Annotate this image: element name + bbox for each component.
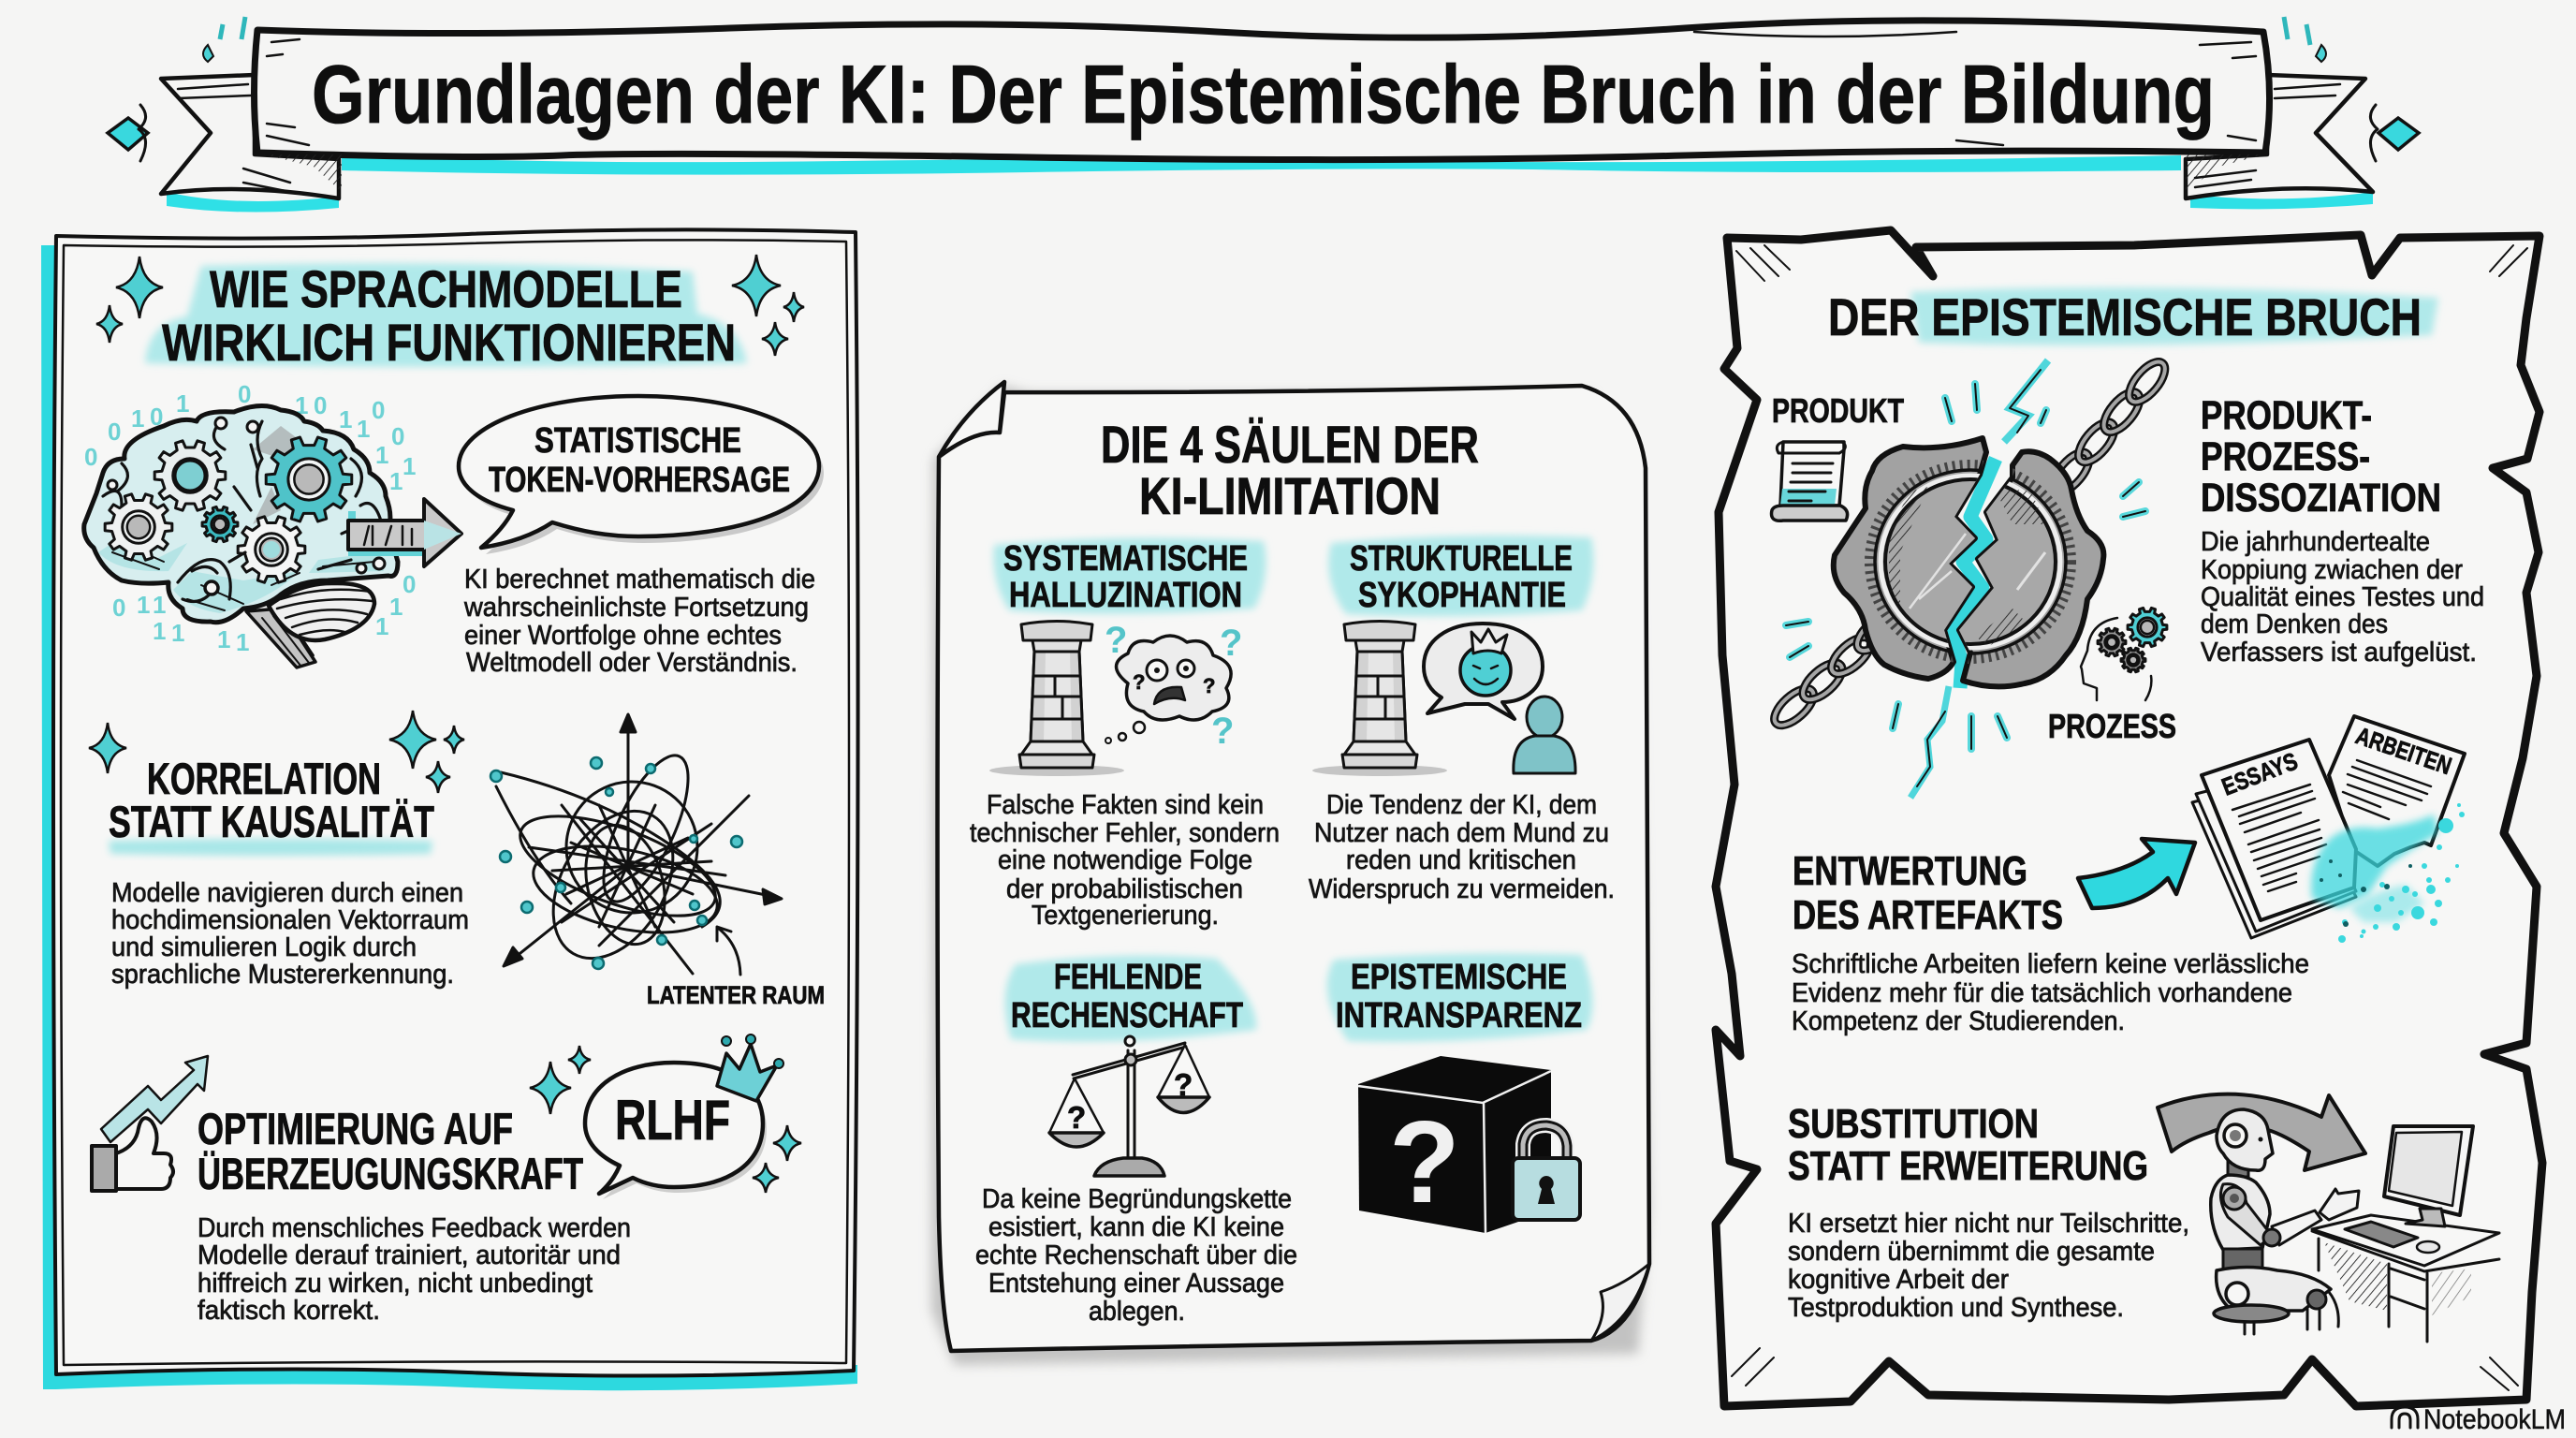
text: Vektorraum: und simulieren Logik durch <box>111 932 417 962</box>
icon: brain with gears: 0 <box>402 570 416 598</box>
heading: Produkt-Prozess-Dissoziation: PRODUKT- <box>2201 393 2372 438</box>
icon: brain with gears: 0 <box>314 391 327 419</box>
icon: brain with gears: 1 <box>176 389 189 418</box>
label: latenter Raum: LATENTER RAUM <box>647 981 825 1009</box>
text: Koppiung: Qualität eines Testes und <box>2201 582 2484 612</box>
icon: brain with gears: 1 <box>153 591 166 619</box>
speech bubble: RLHF <box>585 1063 767 1199</box>
label: Produkt: PRODUKT <box>1772 391 1904 430</box>
text: Nutzer nach dem Mund zu <box>1314 818 1609 848</box>
icon: lightning and sparks <box>1786 360 2145 798</box>
text: Entstehung einer Aussage <box>988 1269 1284 1299</box>
text: Feedback: faktisch korrekt. <box>198 1296 380 1326</box>
heading: DER EPISTEMISCHE BRUCH <box>1828 287 2422 346</box>
pillar 1: systematische Halluzination: HALLUZINATION <box>1009 576 1242 615</box>
sparkles <box>530 1046 801 1193</box>
text: Feedback: hiffreich zu wirken, nicht unbedingt <box>198 1269 593 1299</box>
icon: brain with gears: 1 <box>295 391 308 419</box>
icon: head with gears <box>2081 608 2167 700</box>
panel: wie Sprachmodelle funktionieren <box>41 229 858 1390</box>
icon: confused cloud: ? <box>1105 620 1127 661</box>
icon: flattering speech bubble <box>1424 624 1543 719</box>
icon: black box: ? <box>1389 1098 1460 1227</box>
heading: KI-LIMITATION <box>1139 466 1441 525</box>
icon: confused cloud: ? <box>1220 623 1242 664</box>
heading: Korrelation statt Kausalität: STATT KAUSALITÄT <box>109 797 434 846</box>
heading: Substitution: STATT ERWEITERUNG <box>1788 1143 2148 1189</box>
icon: confused cloud: ? <box>1211 711 1234 752</box>
heading: Korrelation statt Kausalität <box>109 754 434 856</box>
heading: Korrelation statt Kausalität: KORRELATION <box>147 754 381 803</box>
icon: brain with gears: 1 <box>171 619 184 647</box>
text: statistische Vorhersage: KI berechnet mathematisch die <box>464 565 815 594</box>
text: Feedback: Modelle derauf trainiert, autoritär und <box>198 1240 621 1270</box>
text: Schriftliche Arbeiten <box>1792 949 2309 1036</box>
icon: brain with gears: 1 <box>375 612 388 640</box>
text: eine notwendige Folge <box>998 845 1252 875</box>
text: Schriftliche Arbeiten: Kompetenz der Studierenden. <box>1792 1006 2125 1036</box>
heading: Optimierung: ÜBERZEUGUNGSKRAFT <box>198 1149 583 1198</box>
text: Schriftliche Arbeiten: Schriftliche Arbeiten liefern keine verlässliche <box>1792 949 2309 979</box>
sparkles <box>89 711 464 793</box>
icon: confused cloud: ? <box>1203 674 1215 697</box>
heading: Entwertung <box>1793 848 2063 938</box>
text: Feedback <box>198 1213 631 1326</box>
icon: thumbs up with arrow <box>92 1056 208 1191</box>
icon: padlock <box>1513 1125 1580 1220</box>
heading: Optimierung: OPTIMIERUNG AUF <box>198 1104 513 1153</box>
pillar 1: systematische Halluzination <box>970 538 1280 931</box>
text: KI ersetzt: KI ersetzt hier nicht nur Teilschritte, <box>1788 1209 2189 1239</box>
text: KI ersetzt: kognitive Arbeit der <box>1788 1265 2009 1295</box>
text: Vektorraum: sprachliche Mustererkennung. <box>111 960 454 990</box>
icon: brain with gears: 0 <box>108 418 121 446</box>
text: statistische Vorhersage <box>463 565 815 678</box>
chart: latent space scribble <box>490 714 825 1009</box>
text: statistische Vorhersage: wahrscheinlichste Fortsetzung <box>463 593 809 623</box>
speech bubble: statistische token-vorhersage <box>459 396 824 554</box>
sparkles <box>96 255 804 356</box>
text: KI ersetzt: Testproduktion und Synthese. <box>1788 1293 2124 1323</box>
text: Koppiung: Die jahrhundertealte <box>2201 527 2430 557</box>
text: Vektorraum: hochdimensionalen Vektorraum <box>111 905 469 935</box>
icon: brain with gears: 0 <box>391 422 404 450</box>
heading <box>162 259 736 372</box>
text: KI ersetzt <box>1788 1209 2189 1323</box>
text: Vektorraum <box>111 878 469 990</box>
pillar 3: fehlende Rechenschaft: RECHENSCHAFT <box>1011 996 1243 1035</box>
chain: bottom left <box>1768 608 1902 731</box>
robot <box>2211 1109 2359 1334</box>
text: reden und kritischen <box>1346 845 1576 875</box>
text: echte Rechenschaft über die <box>975 1240 1297 1270</box>
icon: scales: ? <box>1174 1067 1193 1102</box>
text: Koppiung: dem Denken des <box>2201 609 2388 639</box>
icon: brain with gears: 1 <box>375 441 388 469</box>
pillar 2: strukturelle Sykophantie: STRUKTURELLE <box>1350 539 1573 579</box>
heading: Optimierung <box>198 1104 583 1198</box>
icon: brain with gears: 0 <box>372 396 385 424</box>
pillar 2: strukturelle Sykophantie <box>1309 536 1615 904</box>
text: Vektorraum: Modelle navigieren durch einen <box>111 878 463 908</box>
text: Feedback: Durch menschliches Feedback werden <box>198 1213 631 1243</box>
chain: top right <box>2047 356 2172 498</box>
text: Falsche Fakten sind kein <box>987 790 1264 820</box>
icon: scroll <box>1771 442 1848 521</box>
icon: pillar <box>1312 622 1447 776</box>
pillar 2: strukturelle Sykophantie: SYKOPHANTIE <box>1358 576 1566 615</box>
speech bubble: statistische token-vorhersage: STATISTISCHE <box>534 421 741 461</box>
heading: Produkt-Prozess-Dissoziation: PROZESS- <box>2201 434 2370 479</box>
heading: DIE 4 SÄULEN DER <box>1101 415 1479 474</box>
panel: der epistemische Bruch <box>1716 230 2542 1406</box>
text: Widerspruch zu vermeiden. <box>1309 874 1615 904</box>
heading: Substitution: SUBSTITUTION <box>1788 1101 2039 1147</box>
sheet: Arbeiten: ARBEITEN <box>2352 721 2455 780</box>
sheet: Arbeiten <box>2329 716 2465 866</box>
icon: brain with gears: 1 <box>389 467 402 495</box>
icon: brain with gears: 0 <box>112 594 125 622</box>
icon: confused cloud <box>1105 620 1242 752</box>
text: Da keine Begründungskette <box>982 1184 1292 1214</box>
pillar 4: epistemische Intransparenz: INTRANSPARENZ <box>1336 996 1582 1035</box>
icon: brain with gears: 1 <box>153 617 166 645</box>
heading: Entwertung: ENTWERTUNG <box>1793 848 2027 894</box>
paper stack: Essays: ESSAYS <box>2217 746 2302 801</box>
pillar 3: fehlende Rechenschaft <box>975 956 1297 1327</box>
speech bubble: statistische token-vorhersage: TOKEN-VORHERSAGE <box>489 461 790 500</box>
crack <box>1952 459 1996 688</box>
icon: essays and papers <box>2192 716 2465 943</box>
title banner <box>108 17 2419 213</box>
icon: brain with gears: 0 <box>84 443 97 471</box>
icon: brain with gears: 1 <box>131 404 144 433</box>
text: Koppiung <box>2201 527 2484 668</box>
icon: brain with gears: 1 <box>357 415 370 443</box>
text: Koppiung: Verfassers ist aufgelüst. <box>2201 638 2477 668</box>
splatter <box>2311 803 2465 943</box>
arrow: cyan <box>2078 839 2195 908</box>
text: ablegen. <box>1089 1297 1185 1327</box>
text: technischer Fehler, sondern <box>970 818 1280 848</box>
icon: brain with gears: 1 <box>389 593 402 621</box>
text: statistische Vorhersage: Weltmodell oder Verständnis. <box>466 648 798 678</box>
heading: WIRKLICH FUNKTIONIEREN <box>162 313 736 372</box>
heading: Produkt-Prozess-Dissoziation: DISSOZIATION <box>2201 476 2441 521</box>
label: Prozess: PROZESS <box>2048 707 2176 745</box>
text: statistische Vorhersage: einer Wortfolge ohne echtes <box>464 621 782 651</box>
text <box>1309 790 1615 904</box>
text: Schriftliche Arbeiten: Evidenz mehr für die tatsächlich vorhandene <box>1792 978 2292 1008</box>
heading: WIE SPRACHMODELLE <box>210 259 682 318</box>
icon: robot at desk <box>2211 1109 2499 1342</box>
heading highlight <box>145 263 747 367</box>
icon: brain with gears: 0 <box>238 380 251 408</box>
icon: person <box>1514 697 1575 773</box>
text <box>975 1184 1297 1327</box>
speech bubble: RLHF: RLHF <box>615 1089 730 1152</box>
heading <box>1101 415 1479 525</box>
text: der probabilistischen <box>1006 874 1243 904</box>
text: esistiert, kann die KI keine <box>988 1212 1284 1242</box>
panel: die 4 Säulen <box>931 382 1649 1365</box>
arrow: substitution <box>2158 1094 2365 1170</box>
text <box>970 790 1280 931</box>
heading: Entwertung: DES ARTEFAKTS <box>1793 892 2063 938</box>
heading: Substitution <box>1788 1101 2148 1189</box>
icon: brain with gears: 1 <box>217 625 230 653</box>
icon: pillar <box>989 622 1124 776</box>
text: Textgenerierung. <box>1032 901 1219 931</box>
text: Koppiung: Koppiung zwiachen der <box>2201 555 2463 585</box>
icon: brain with gears: 1 <box>402 452 416 480</box>
icon: scales: ? <box>1067 1100 1086 1135</box>
icon: confused cloud: ? <box>1133 670 1145 694</box>
arrow: brain to bubble <box>348 499 461 566</box>
icon: broken wax seal <box>1834 438 2103 688</box>
pillar 4: epistemische Intransparenz: EPISTEMISCHE <box>1351 958 1567 997</box>
icon: crown <box>717 1034 783 1101</box>
icon: scales <box>1049 1036 1209 1176</box>
monitor and desk <box>2312 1126 2499 1342</box>
icon: brain with gears: 0 <box>150 403 163 431</box>
pillar 1: systematische Halluzination: SYSTEMATISCHE <box>1003 539 1248 579</box>
icon: black box <box>1358 1056 1551 1233</box>
pillar 3: fehlende Rechenschaft: FEHLENDE <box>1054 958 1202 997</box>
paper stack: Essays <box>2192 740 2356 938</box>
icon: brain with gears: 1 <box>137 591 150 619</box>
icon: brain with gears: 1 <box>236 628 249 656</box>
heading: Produkt-Prozess-Dissoziation <box>2201 393 2441 521</box>
text: Die Tendenz der KI, dem <box>1326 790 1597 820</box>
title text: Grundlagen der KI: Der Epistemische Bruch in der Bildung <box>312 48 2215 140</box>
icon: brain with gears <box>84 380 416 668</box>
icon: brain with gears: 1 <box>339 405 352 433</box>
pillar 4: epistemische Intransparenz <box>1327 953 1592 1233</box>
text: KI ersetzt: sondern übernimmt die gesamte <box>1788 1237 2155 1267</box>
